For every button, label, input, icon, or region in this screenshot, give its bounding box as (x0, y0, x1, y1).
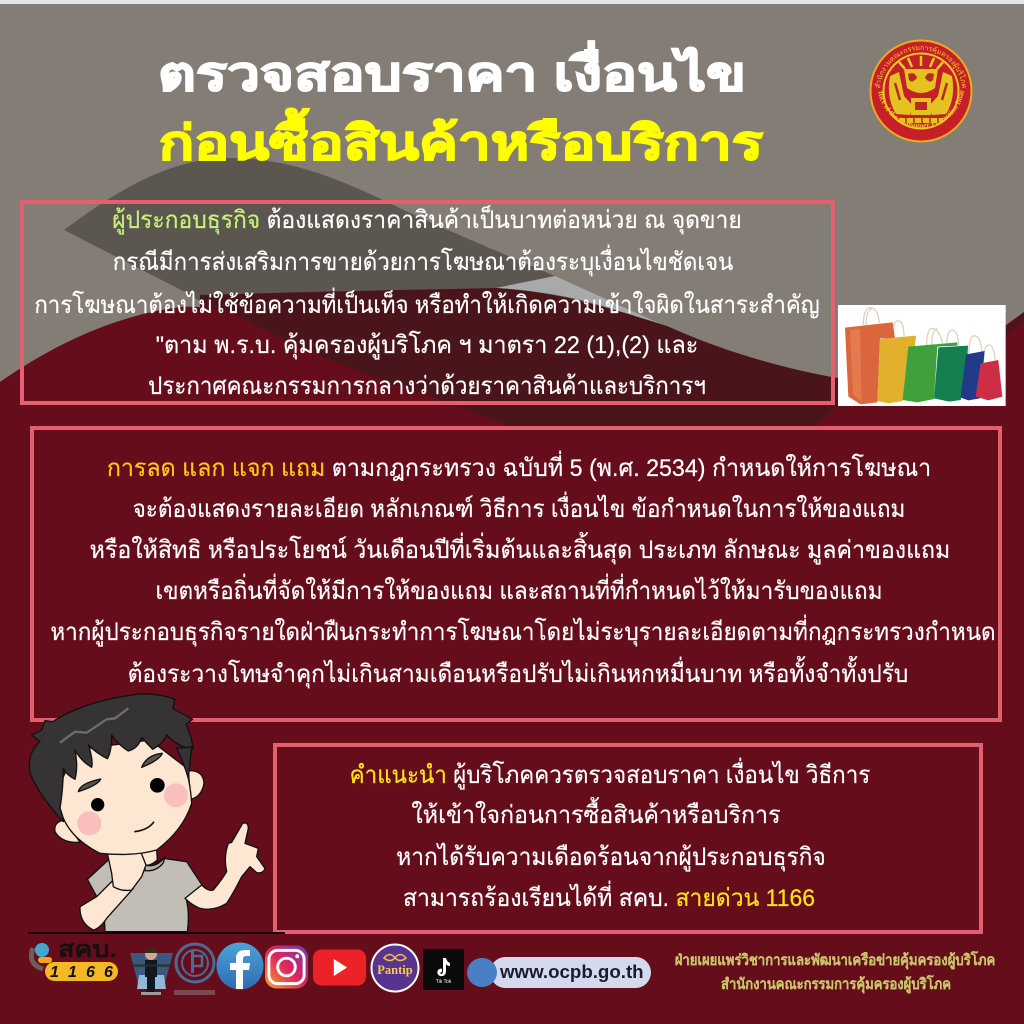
text line: "ตาม พ.ร.บ. คุ้มครองผู้บริโภค ฯ มาตรา 22 (1),(2) และ (156, 332, 698, 359)
text line: หรือให้สิทธิ หรือประโยชน์ วันเดือนปีที่เริ่มต้นและสิ้นสุด ประเภท ลักษณะ มูลค่าของแถม (90, 537, 950, 564)
logo: OCPB 1166 hotline: 6 (104, 964, 113, 981)
footer credit line 2: สำนักงานคณะกรรมการคุ้มครองผู้บริโภค (721, 976, 950, 993)
website pill (490, 957, 651, 988)
text line: จะต้องแสดงรายละเอียด หลักเกณฑ์ วิธีการ เงื่อนไข ข้อกำหนดในการให้ของแถม (133, 496, 905, 523)
logo: website address (467, 957, 651, 988)
icon: youtube (312, 950, 366, 986)
logo: OCPB 1166 hotline: 1 (50, 964, 59, 981)
text line: กรณีมีการส่งเสริมการขายด้วยการโฆษณาต้องระบุเงื่อนไขชัดเจน (113, 249, 733, 276)
panel: advice (273, 743, 983, 934)
website url: www.ocpb.go.th (500, 961, 644, 982)
logo: circular emblem (174, 942, 216, 995)
image: shopping bags (838, 305, 1006, 406)
logo: OCPB 1166 hotline: 1 (68, 964, 77, 981)
logo: pantip (370, 944, 420, 992)
text line: การโฆษณาต้องไม่ใช้ข้อความที่เป็นเท็จ หรือทำให้เกิดความเข้าใจผิดในสาระสำคัญ (34, 292, 820, 319)
logo: pantip: Pantip (377, 963, 413, 977)
icon: globe (467, 958, 497, 987)
logo: OCPB 1166 hotline (28, 942, 118, 981)
text line: ประกาศคณะกรรมการกลางว่าด้วยราคาสินค้าและบริการฯ (148, 373, 706, 400)
logo: person website (130, 948, 173, 995)
text line: หากได้รับความเดือดร้อนจากผู้ประกอบธุรกิจ (396, 844, 825, 871)
logo: OCPB 1166 hotline: 6 (86, 964, 95, 981)
text line: คำแนะนำ ผู้บริโภคควรตรวจสอบราคา เงื่อนไข วิธีการ (349, 762, 870, 789)
footer credit line 1: ฝ่ายเผยแพร่วิชาการและพัฒนาเครือข่ายคุ้มครองผู้บริโภค (675, 952, 995, 969)
text line: ให้เข้าใจก่อนการซื้อสินค้าหรือบริการ (411, 802, 781, 829)
footer logos (28, 942, 651, 995)
title line 1: ตรวจสอบราคา เงื่อนไข (158, 47, 746, 100)
text line: ผู้ประกอบธุรกิจ ต้องแสดงราคาสินค้าเป็นบาทต่อหน่วย ณ จุดขาย (112, 207, 741, 234)
text line: การลด แลก แจก แถม ตามกฎกระทรวง ฉบับที่ 5 (พ.ศ. 2534) กำหนดให้การโฆษณา (106, 455, 931, 482)
panel: business operators (20, 200, 835, 405)
icon: cartoon boy pointing (28, 693, 285, 934)
icon: instagram (265, 946, 308, 988)
icon: consumer protection board seal: สำนักงานคณะกรรมการคุ้มครองผู้บริโภค (874, 46, 966, 88)
icon: tiktok: Tik Tok (436, 979, 452, 985)
text line: เขตหรือถิ่นที่จัดให้มีการให้ของแถม และสถานที่ที่กำหนดไว้ให้มารับของแถม (155, 578, 882, 605)
text line: หากผู้ประกอบธุรกิจรายใดฝ่าฝืนกระทำการโฆษณาโดยไม่ระบุรายละเอียดตามที่กฎกระทรวงกำหนด (50, 619, 995, 646)
icon: tiktok (423, 949, 464, 990)
text line: สามารถร้องเรียนได้ที่ สคบ. สายด่วน 1166 (403, 885, 815, 912)
panel: discounts and giveaways (30, 426, 1002, 722)
text line: ต้องระวางโทษจำคุกไม่เกินสามเดือนหรือปรับไม่เกินหกหมื่นบาท หรือทั้งจำทั้งปรับ (127, 661, 908, 688)
icon: facebook (216, 942, 264, 990)
title line 2: ก่อนซื้อสินค้าหรือบริการ (159, 116, 763, 169)
